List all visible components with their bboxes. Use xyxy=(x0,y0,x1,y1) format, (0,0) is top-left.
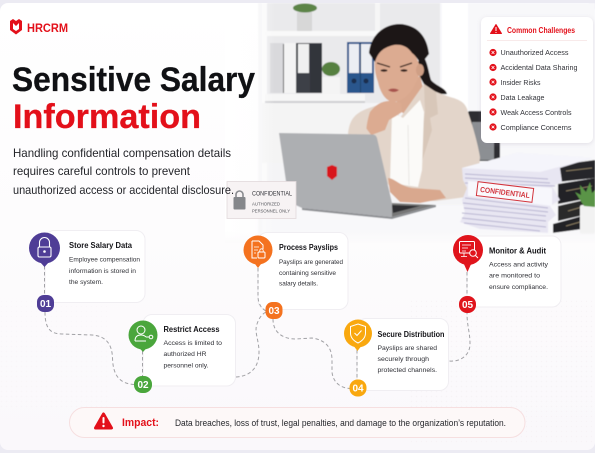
panel: step 3 process payslips: salary details. xyxy=(279,280,318,288)
icon: warning xyxy=(96,414,112,428)
laptop base xyxy=(392,203,436,217)
panel: step 2 restrict access: personnel only. xyxy=(164,362,209,370)
neck xyxy=(396,76,423,114)
office photo xyxy=(264,3,595,234)
challenge list: Accidental Data Sharing xyxy=(500,63,578,72)
challenge list: Compliance Concerns xyxy=(500,123,572,132)
challenge list: Data Leakage xyxy=(500,93,544,102)
hand at chin xyxy=(366,101,402,137)
laptop logo xyxy=(327,165,337,180)
panel: step 3 process payslips: Process Payslips xyxy=(279,243,338,252)
shelves xyxy=(265,31,380,36)
logo: HRCRM xyxy=(27,23,68,35)
panel: step 2 restrict access: Restrict Access xyxy=(164,325,220,334)
panel: common challenges xyxy=(481,17,593,143)
title: Information xyxy=(13,98,201,136)
confidential sign: AUTHORIZED xyxy=(252,202,280,208)
hand on keyboard xyxy=(388,178,446,203)
step number badges: 01 xyxy=(40,299,51,310)
panel: step 1 store salary data: the system. xyxy=(69,279,103,286)
jacket xyxy=(348,84,480,201)
face xyxy=(375,43,420,102)
panel: step 4 secure distribution: Secure Distribution xyxy=(378,330,445,339)
panel: step 2 restrict access xyxy=(143,314,236,386)
panel: step 4 secure distribution: Payslips are shared xyxy=(378,345,437,352)
icon: padlock xyxy=(234,191,246,210)
challenge list: Unauthorized Access xyxy=(500,48,569,57)
panel: step 1 store salary data: Employee compensation xyxy=(69,256,140,264)
icon: step 5 audit monitor pin xyxy=(453,235,483,272)
confidential sign: CONFIDENTIAL xyxy=(252,190,292,198)
challenge list: Weak Access Controls xyxy=(500,108,572,117)
panel: step 4 secure distribution: securely through xyxy=(378,356,429,363)
confidential stamp xyxy=(476,182,534,202)
icon: warning triangle xyxy=(490,24,502,34)
step number badges: 05 xyxy=(462,300,473,311)
step number badges: 04 xyxy=(352,384,364,394)
laptop lid xyxy=(279,133,392,217)
confidential stamp: CONFIDENTIAL xyxy=(480,185,531,200)
panel: step 5 monitor and audit: are monitored to xyxy=(489,272,540,280)
dark binders xyxy=(270,43,284,93)
chair xyxy=(468,111,500,161)
confidential sign xyxy=(227,182,296,218)
step number badges xyxy=(37,295,476,396)
panel: step 4 secure distribution: protected channels. xyxy=(378,367,437,374)
step number badges: 03 xyxy=(268,306,280,317)
icon: step 1 lock pin xyxy=(29,232,60,267)
paper stack xyxy=(460,157,579,233)
panel: step 2 restrict access: authorized HR xyxy=(164,351,207,358)
plant xyxy=(322,77,340,94)
icon: step 2 user key pin xyxy=(128,320,158,352)
shirt xyxy=(390,100,424,187)
logo xyxy=(10,19,68,35)
confidential sign: PERSONNEL ONLY xyxy=(252,208,291,214)
impact banner xyxy=(70,408,525,438)
title xyxy=(12,61,255,136)
challenge list xyxy=(489,48,578,132)
panel: step 1 store salary data xyxy=(45,230,145,302)
panel: step 3 process payslips: containing sensitive xyxy=(279,270,336,277)
panel: step 4 secure distribution xyxy=(357,318,448,390)
impact banner: Data breaches, loss of trust, legal penalties, and damage to the organization’s reputation. xyxy=(175,418,506,428)
plant and pot on top shelf xyxy=(297,12,312,31)
blue binders xyxy=(347,42,374,93)
panel: step 3 process payslips: Payslips are generated xyxy=(279,259,343,266)
intro text: unauthorized access or accidental disclosure. xyxy=(13,183,234,197)
dashed connector path xyxy=(44,266,470,388)
panel: step 5 monitor and audit: Monitor & Audit xyxy=(489,246,546,256)
desk xyxy=(262,205,595,243)
panel: step 5 monitor and audit: Access and activity xyxy=(489,262,549,268)
eyes, brows, mouth xyxy=(377,63,412,67)
hair xyxy=(369,24,429,64)
panel: step 1 store salary data: Store Salary Data xyxy=(69,241,133,250)
intro text: Handling confidential compensation details xyxy=(13,146,231,160)
icon: step 4 shield pin xyxy=(344,320,372,351)
panel: step 3 process payslips xyxy=(258,232,348,310)
panel: step 5 monitor and audit: ensure compliance. xyxy=(489,284,548,291)
panel: common challenges: Common Challenges xyxy=(507,26,575,35)
panel: step 5 monitor and audit xyxy=(467,236,561,307)
binders under papers xyxy=(558,160,595,182)
intro text xyxy=(13,146,234,197)
step number badges: 02 xyxy=(137,380,149,391)
small plant xyxy=(579,204,590,230)
panel: step 1 store salary data: information is stored in xyxy=(69,268,136,275)
challenge list: Insider Risks xyxy=(500,78,541,87)
panel: step 2 restrict access: Access is limited to xyxy=(164,340,222,347)
impact banner: Impact: xyxy=(122,417,159,429)
title: Sensitive Salary xyxy=(12,61,255,99)
ponytail xyxy=(418,58,448,95)
icon: step 3 document lock pin xyxy=(244,236,272,268)
intro text: requires careful controls to prevent xyxy=(13,164,191,178)
